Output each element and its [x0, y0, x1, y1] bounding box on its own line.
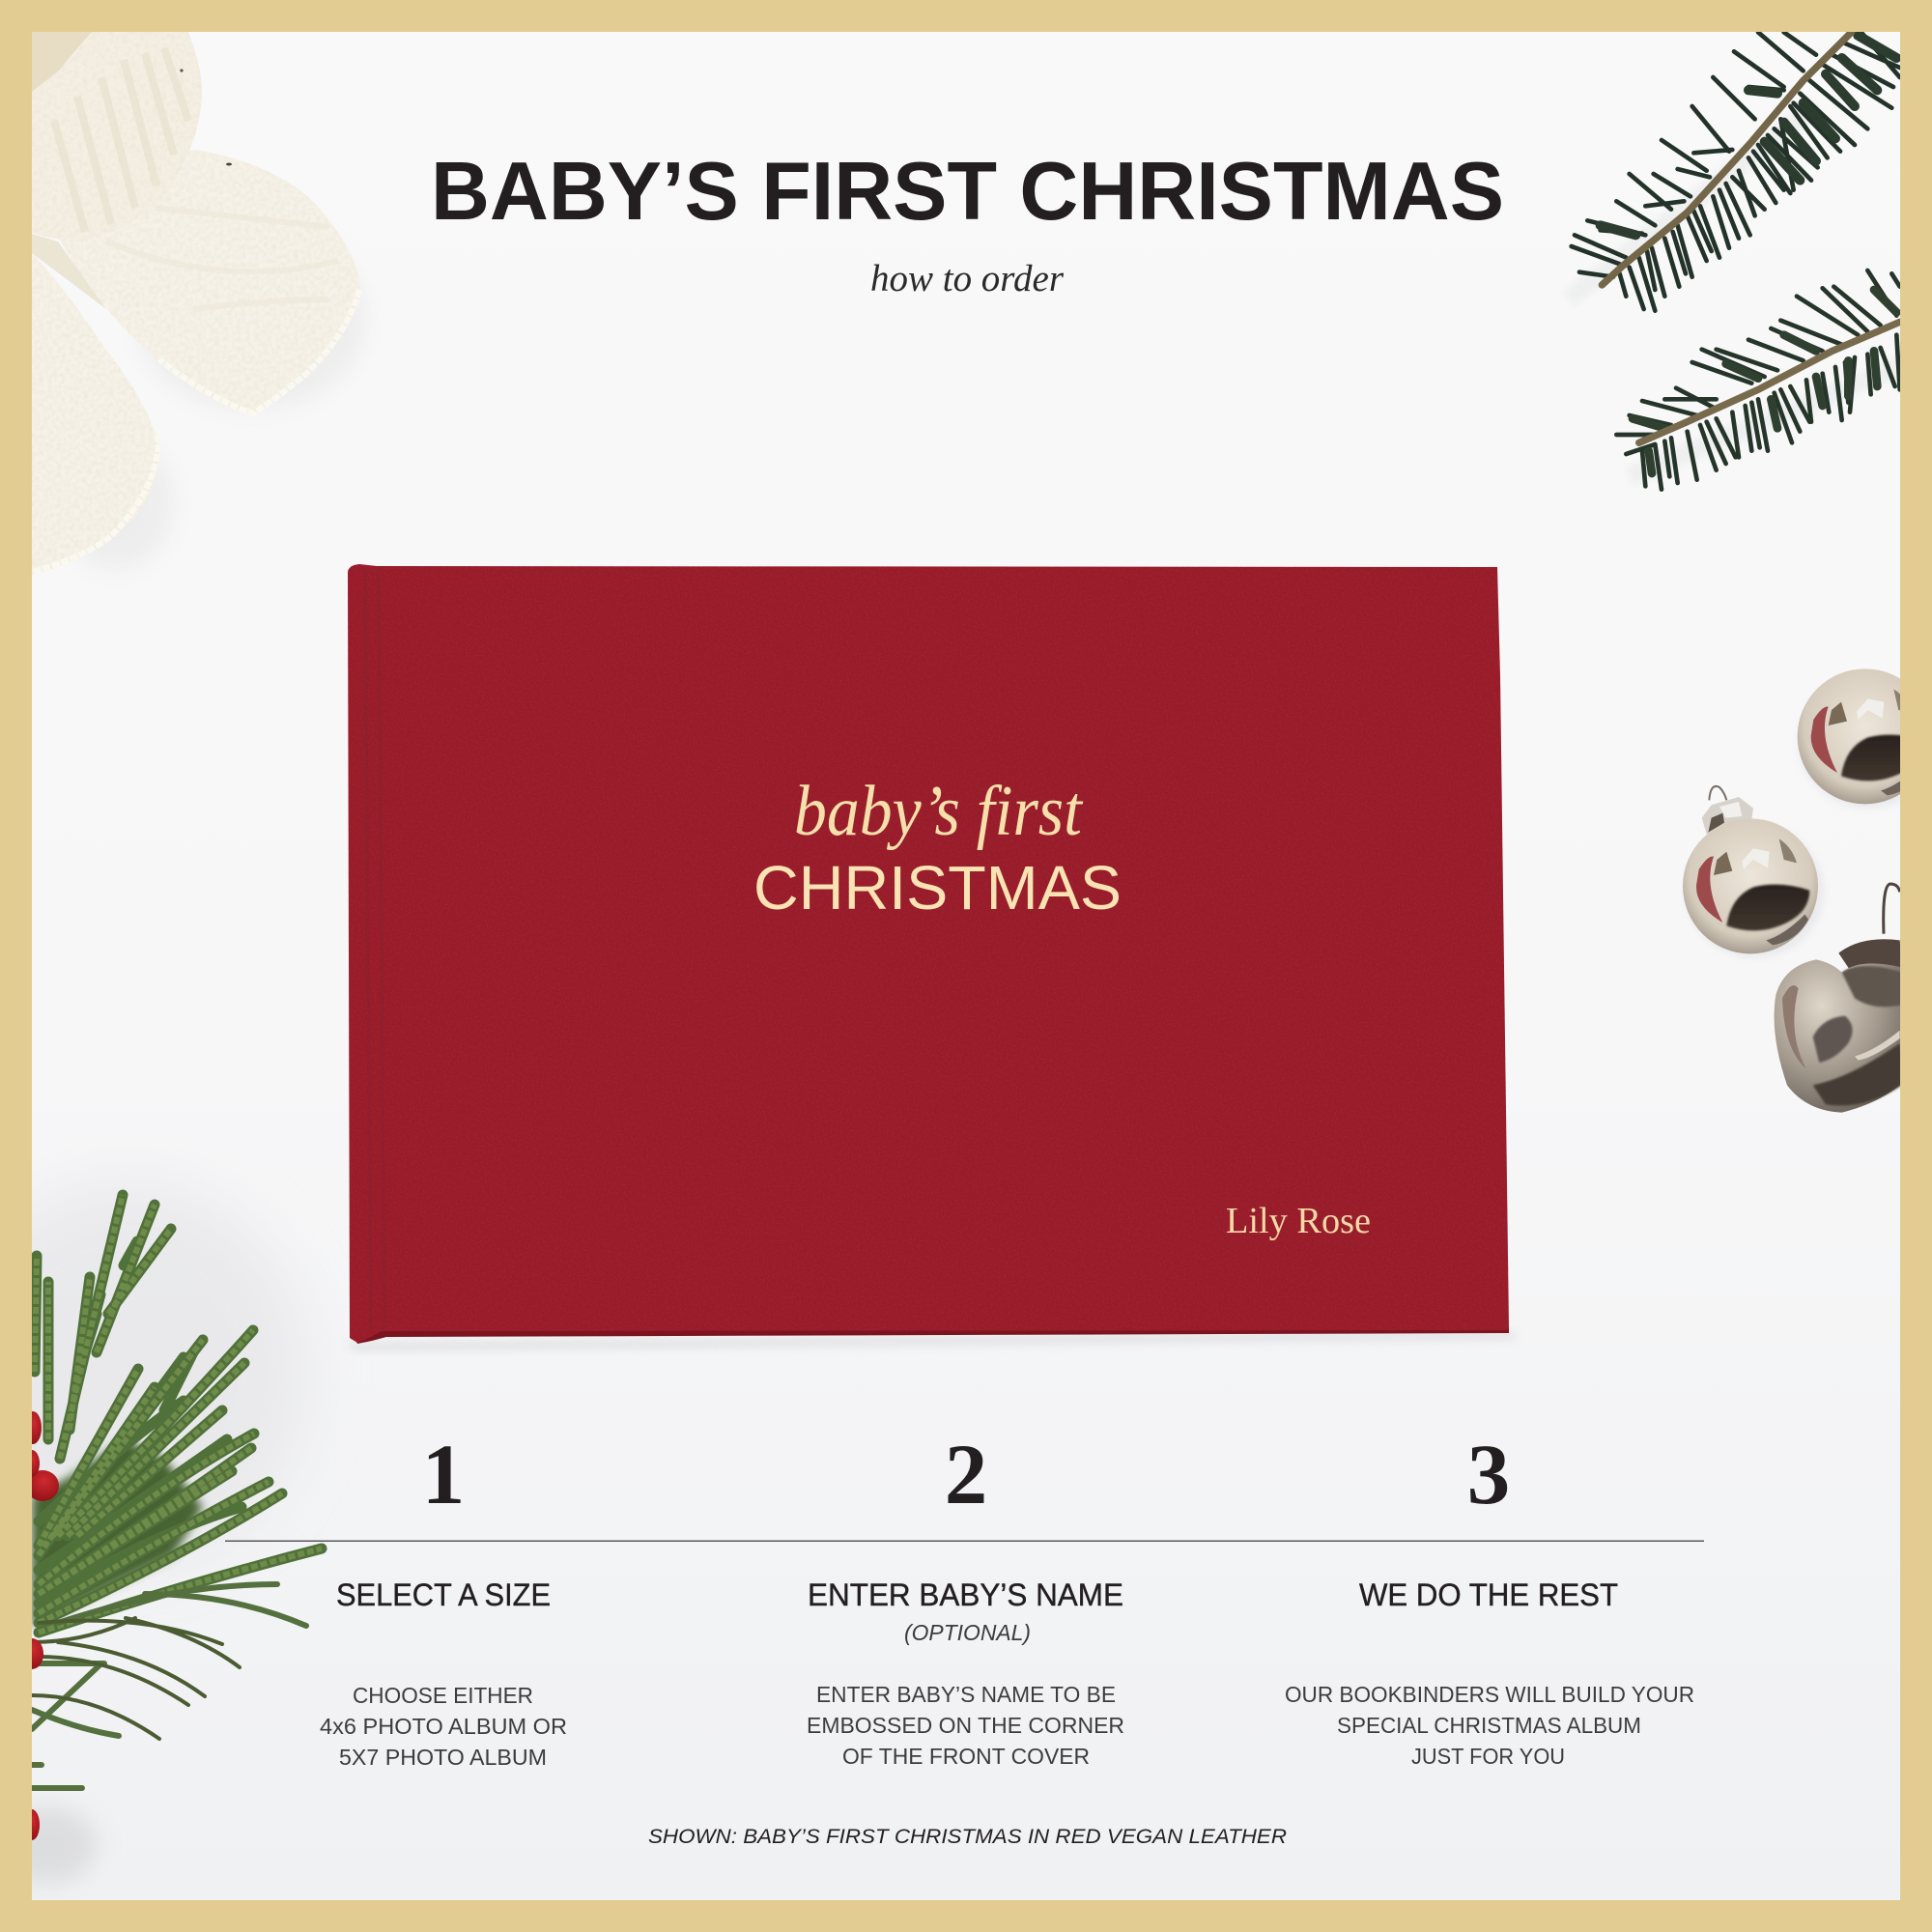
step 1 description [320, 1683, 567, 1770]
step 1 description: 4x6 PHOTO ALBUM OR [320, 1714, 567, 1739]
cuff ribs [54, 48, 188, 232]
upper bootie cuff [32, 32, 202, 242]
red berries [20, 1411, 59, 1840]
step 3 description [1285, 1682, 1694, 1769]
step 1 description: CHOOSE EITHER [353, 1683, 533, 1708]
cover title: baby's first: baby’s first [794, 772, 1084, 851]
cable stitch [106, 208, 338, 309]
bauble: heart [1775, 884, 1910, 1113]
dense sprig core [32, 1439, 203, 1628]
stem: lower branch [1639, 322, 1900, 442]
step 2 heading: ENTER BABY’S NAME [808, 1577, 1123, 1612]
step 2 number: 2 [945, 1428, 987, 1522]
bauble: middle [1683, 786, 1824, 958]
cover title: CHRISTMAS: CHRISTMAS [753, 853, 1122, 923]
subtitle: how to order [870, 258, 1065, 299]
icon: green sprig with red berries [0, 1179, 322, 1884]
step 2 optional note: (OPTIONAL) [904, 1620, 1031, 1645]
title: BABY’S FIRST CHRISTMAS [431, 146, 1504, 238]
step 2 description: ENTER BABY’S NAME TO BE [816, 1682, 1116, 1707]
book shadow [348, 1331, 1517, 1350]
bootie opening [32, 32, 92, 92]
needles: lower branch [1616, 270, 1900, 490]
step 1 heading: SELECT A SIZE [336, 1577, 551, 1612]
soft shadows [1568, 106, 1913, 476]
sprig shadows [32, 1193, 288, 1509]
icon: pine branches top right [1568, 32, 1913, 490]
step 2 description [807, 1682, 1124, 1769]
step 1 description: 5X7 PHOTO ALBUM [339, 1745, 547, 1770]
sole rims [32, 290, 359, 572]
step 3 description: SPECIAL CHRISTMAS ALBUM [1337, 1713, 1641, 1738]
needles: upper branch [1572, 32, 1900, 311]
embossed name: Lily Rose [1226, 1201, 1371, 1241]
step 3 description: JUST FOR YOU [1411, 1744, 1565, 1769]
bauble: top [1797, 668, 1900, 808]
icon: silver baubles [1683, 668, 1900, 1113]
book pages edge and back board [350, 1325, 1509, 1344]
upper bootie foot [58, 150, 359, 413]
step 3 description: OUR BOOKBINDERS WILL BUILD YOUR [1285, 1682, 1694, 1707]
step 2 description: OF THE FRONT COVER [842, 1744, 1090, 1769]
upper thick fronds [32, 1195, 322, 1788]
divider line [225, 1540, 1704, 1542]
stem: upper branch [1602, 32, 1852, 285]
step 3 heading: WE DO THE REST [1359, 1577, 1618, 1612]
red photo album [348, 564, 1517, 1350]
step 2 [807, 1428, 1124, 1769]
spine hinge [365, 566, 384, 1331]
step 1 number: 1 [422, 1428, 465, 1522]
step 1 [320, 1428, 567, 1770]
step 3 [1285, 1428, 1694, 1769]
book cover [348, 564, 1509, 1343]
lower bootie [32, 253, 159, 575]
step 3 number: 3 [1467, 1428, 1510, 1522]
step 2 description: EMBOSSED ON THE CORNER [807, 1713, 1124, 1738]
footnote: SHOWN: BABY’S FIRST CHRISTMAS IN RED VEGAN LEATHER [648, 1826, 1287, 1848]
icon: knitted baby booties [32, 32, 367, 575]
lower thin needles [32, 1618, 240, 1739]
